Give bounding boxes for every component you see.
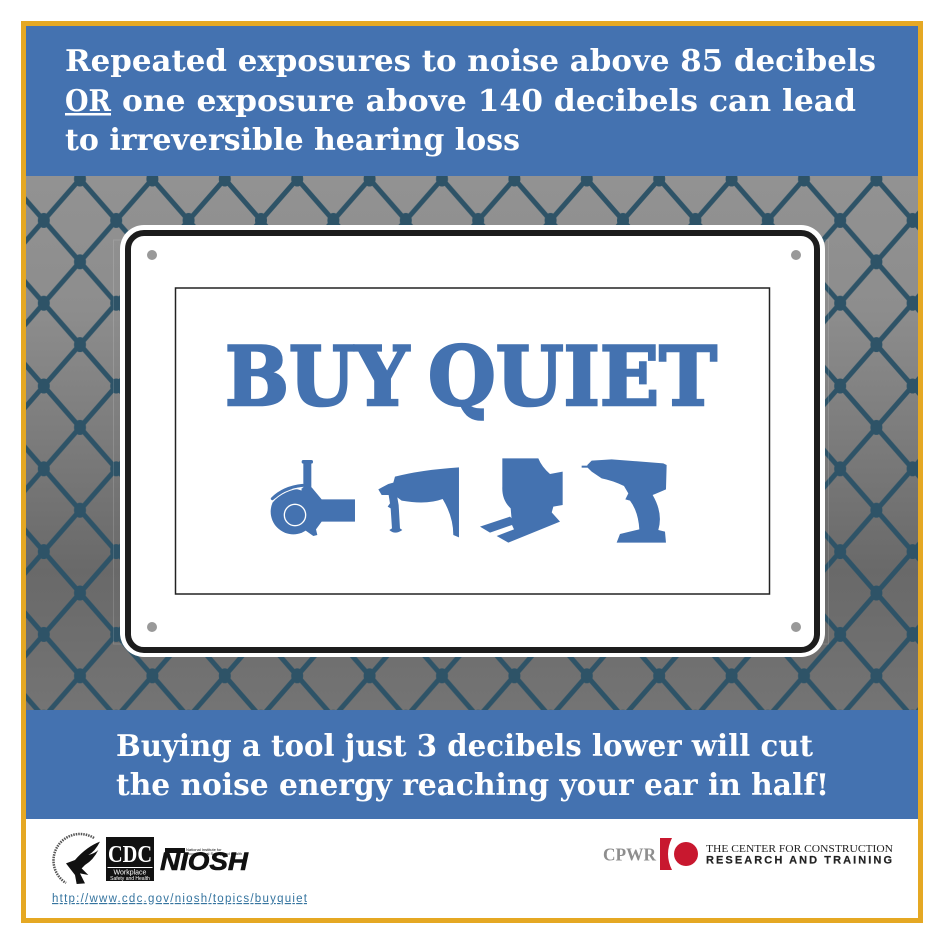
logo: NIOSH: NIOSH <box>160 848 249 876</box>
heading: hearing loss warning: OR <box>65 84 112 119</box>
heading: hearing loss warning: one exposure above 140 decibels can lead <box>122 84 856 119</box>
panel: bottom blue banner <box>26 710 918 819</box>
logo: CDC Workplace Safety and Health: Workplace <box>114 870 147 876</box>
logo: CPWR: RESEARCH AND TRAINING <box>706 854 892 866</box>
icon: jigsaw <box>480 458 563 543</box>
panel: top blue banner <box>26 26 918 176</box>
panel: chain-link fence background <box>26 176 918 710</box>
logo: CDC Workplace Safety and Health: CDC <box>108 842 152 868</box>
sign title: BUY QUIET <box>225 330 717 425</box>
heading: hearing loss warning: to irreversible hearing loss <box>65 123 520 158</box>
sign title: BUY QUIET: QUIET <box>428 330 717 425</box>
logo: NIOSH: National Institute for <box>186 847 222 852</box>
sign screws <box>147 250 801 632</box>
logo: CPWR <box>603 838 893 870</box>
link: Buy Quiet URL: http://www.cdc.gov/niosh/topics/buyquiet <box>52 893 308 905</box>
heading: hearing loss warning <box>65 44 876 158</box>
text: three decibel message <box>116 729 829 803</box>
text: three decibel message: the noise energy reaching your ear in half! <box>116 768 829 803</box>
icon: hammer drill <box>378 467 459 537</box>
logo: HHS eagle seal <box>54 834 100 884</box>
heading: hearing loss warning: Repeated exposures to noise above 85 decibels <box>65 44 876 79</box>
panel: sign <box>120 225 825 657</box>
sign title: BUY QUIET: BUY <box>225 330 410 425</box>
icon: cordless drill <box>582 459 667 543</box>
logo: CPWR: THE CENTER FOR CONSTRUCTION <box>706 844 893 855</box>
logo: NIOSH: Occupational Safety and Health <box>186 851 242 856</box>
text: three decibel message: Buying a tool just 3 decibels lower will cut <box>116 729 813 764</box>
icon: angle grinder <box>271 460 355 536</box>
logo: CDC Workplace Safety and Health <box>106 837 154 882</box>
logo: CPWR: CPWR <box>603 844 657 864</box>
logo: CDC Workplace Safety and Health: Safety and Health <box>110 876 150 882</box>
